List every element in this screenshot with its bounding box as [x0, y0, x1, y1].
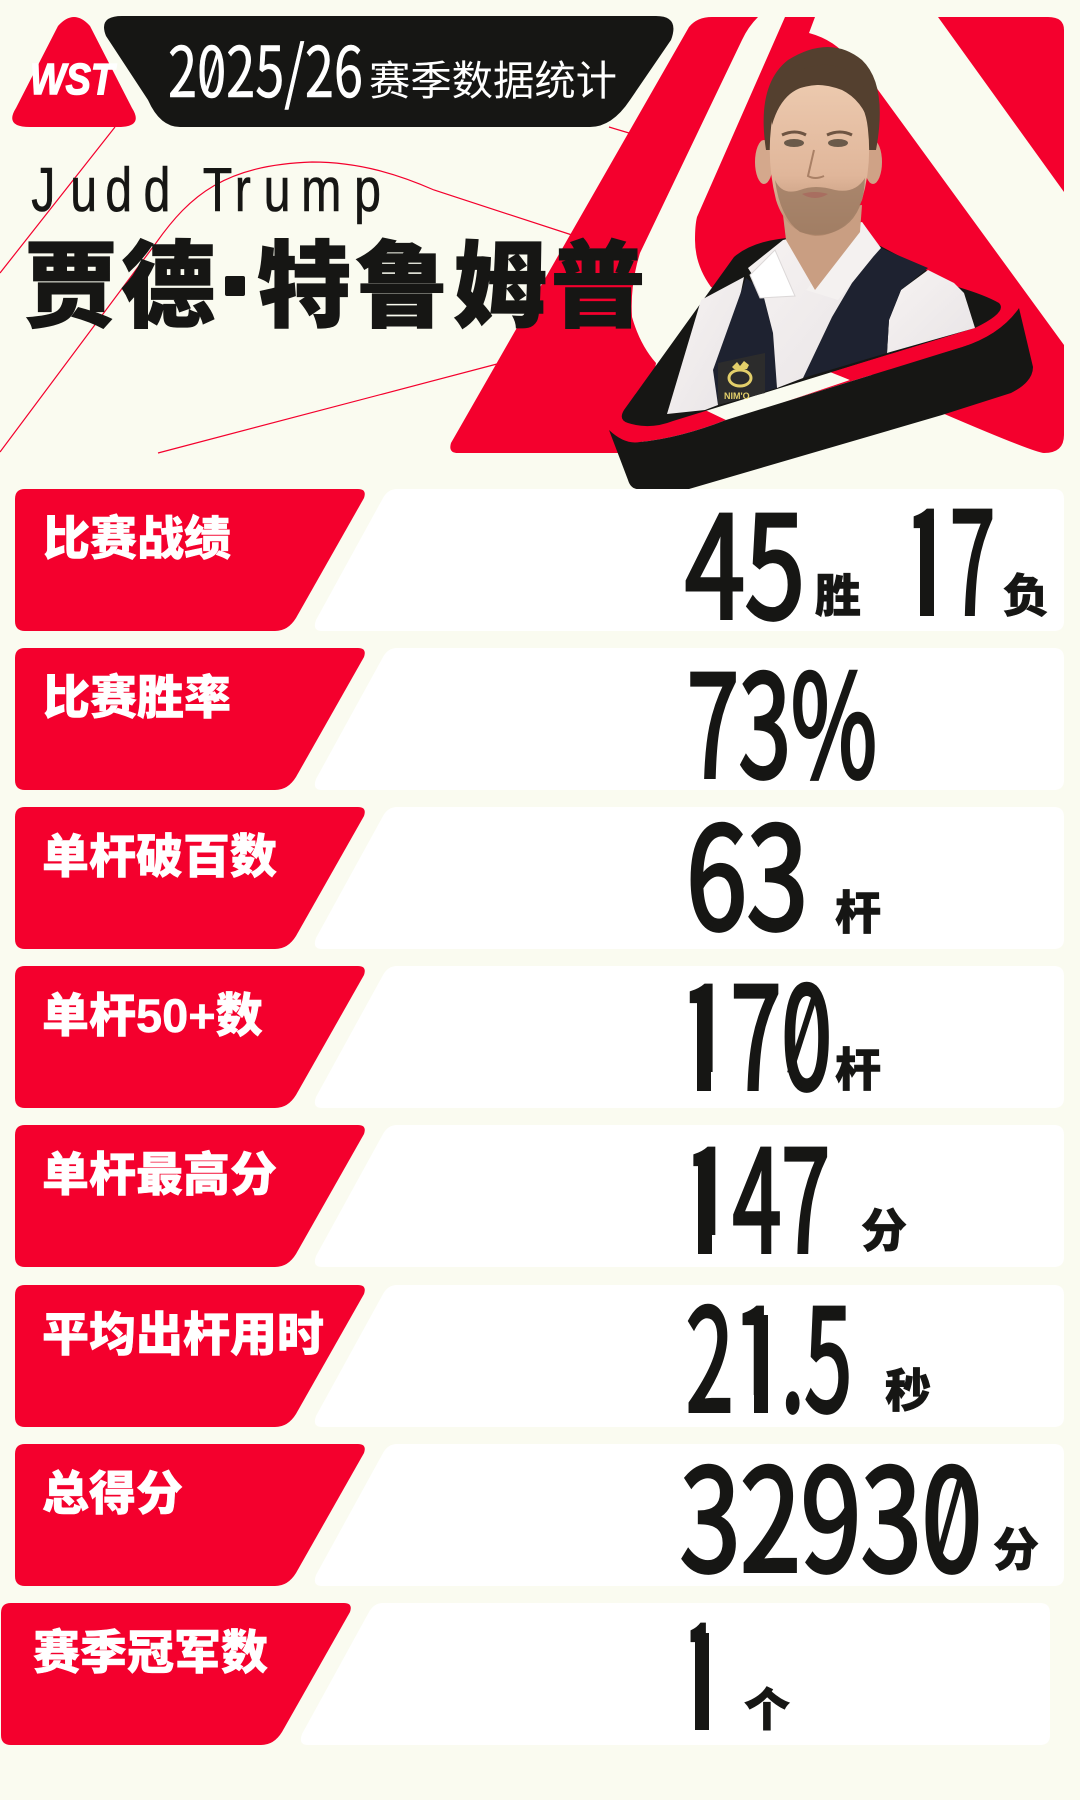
shirt sleeves: [667, 277, 744, 414]
hair: [764, 47, 880, 150]
row: 平均出杆用时: 秒: [885, 1365, 931, 1417]
badge: [718, 353, 765, 405]
title banner: 赛季数据统计: [369, 58, 617, 104]
Chinese name: [24, 234, 645, 339]
row: 单杆破百数: 63: [686, 765, 808, 970]
row: 比赛战绩: 胜: [815, 570, 861, 622]
row: 单杆50+数: [15, 925, 1064, 1130]
row: 单杆最高分: 分: [861, 1205, 907, 1257]
row: 赛季冠军数: 个: [744, 1684, 790, 1736]
row: 比赛战绩: 比赛战绩: [43, 512, 231, 565]
row: 单杆最高分: 单杆最高分: [42, 1148, 277, 1201]
red triangle backdrop: [450, 17, 1064, 453]
row: 单杆50+数: 杆: [835, 1044, 881, 1096]
English name: JuddTrump: [31, 155, 381, 224]
row: 单杆破百数: [15, 765, 1064, 970]
Chinese name: 贾德: [24, 234, 215, 339]
row: 单杆50+数: 170: [680, 925, 832, 1130]
title banner: [104, 16, 673, 127]
badge: NIM'O: [724, 391, 750, 401]
row: 比赛战绩: 17: [905, 450, 995, 655]
brows: [782, 132, 852, 135]
row: 总得分: 分: [993, 1524, 1039, 1576]
logo: WST red triangle: [12, 17, 136, 127]
ears: [755, 140, 773, 184]
row: 赛季冠军数: 赛季冠军数: [33, 1626, 268, 1679]
row: 单杆50+数: 单杆50+数: [42, 989, 263, 1042]
row: 平均出杆用时: [15, 1247, 1064, 1452]
row: 比赛胜率: 73%: [687, 613, 877, 818]
row: 比赛胜率: [15, 613, 1064, 818]
row: 单杆最高分: 147: [684, 1088, 830, 1293]
row: 单杆最高分: [15, 1088, 1064, 1293]
shirt front: [748, 222, 881, 388]
row: 比赛战绩: [15, 450, 1064, 659]
row: 总得分: 总得分: [42, 1467, 183, 1520]
row: 单杆破百数: 单杆破百数: [42, 830, 277, 883]
3D black and red frame: [609, 230, 1033, 489]
row: 赛季冠军数: [1, 1564, 1050, 1769]
mouth: [802, 192, 828, 198]
row: 总得分: 32930: [680, 1407, 982, 1612]
title banner: 2025/26: [168, 17, 363, 118]
Chinese name: 特鲁姆普: [257, 234, 645, 339]
row: 平均出杆用时: 平均出杆用时: [42, 1308, 324, 1361]
row: 比赛胜率: 比赛胜率: [43, 671, 231, 724]
logo: WST red triangle: WST: [30, 55, 117, 104]
face: [770, 85, 869, 236]
nose: [808, 150, 824, 178]
eyes: [784, 139, 804, 147]
row: 单杆破百数: 杆: [835, 887, 881, 939]
row: 总得分: [15, 1407, 1064, 1612]
row: 赛季冠军数: 1: [684, 1564, 718, 1769]
beard: [775, 178, 865, 235]
thin decorative red lines: [0, 127, 629, 453]
neck: [783, 205, 862, 290]
waistcoat: [713, 278, 777, 405]
portrait of Judd Trump: [667, 47, 975, 414]
row: 比赛战绩: 负: [1003, 570, 1049, 622]
row: 比赛战绩: 45: [685, 454, 805, 659]
row: 平均出杆用时: 21.5: [686, 1247, 852, 1452]
hair top fringe: [772, 65, 870, 125]
